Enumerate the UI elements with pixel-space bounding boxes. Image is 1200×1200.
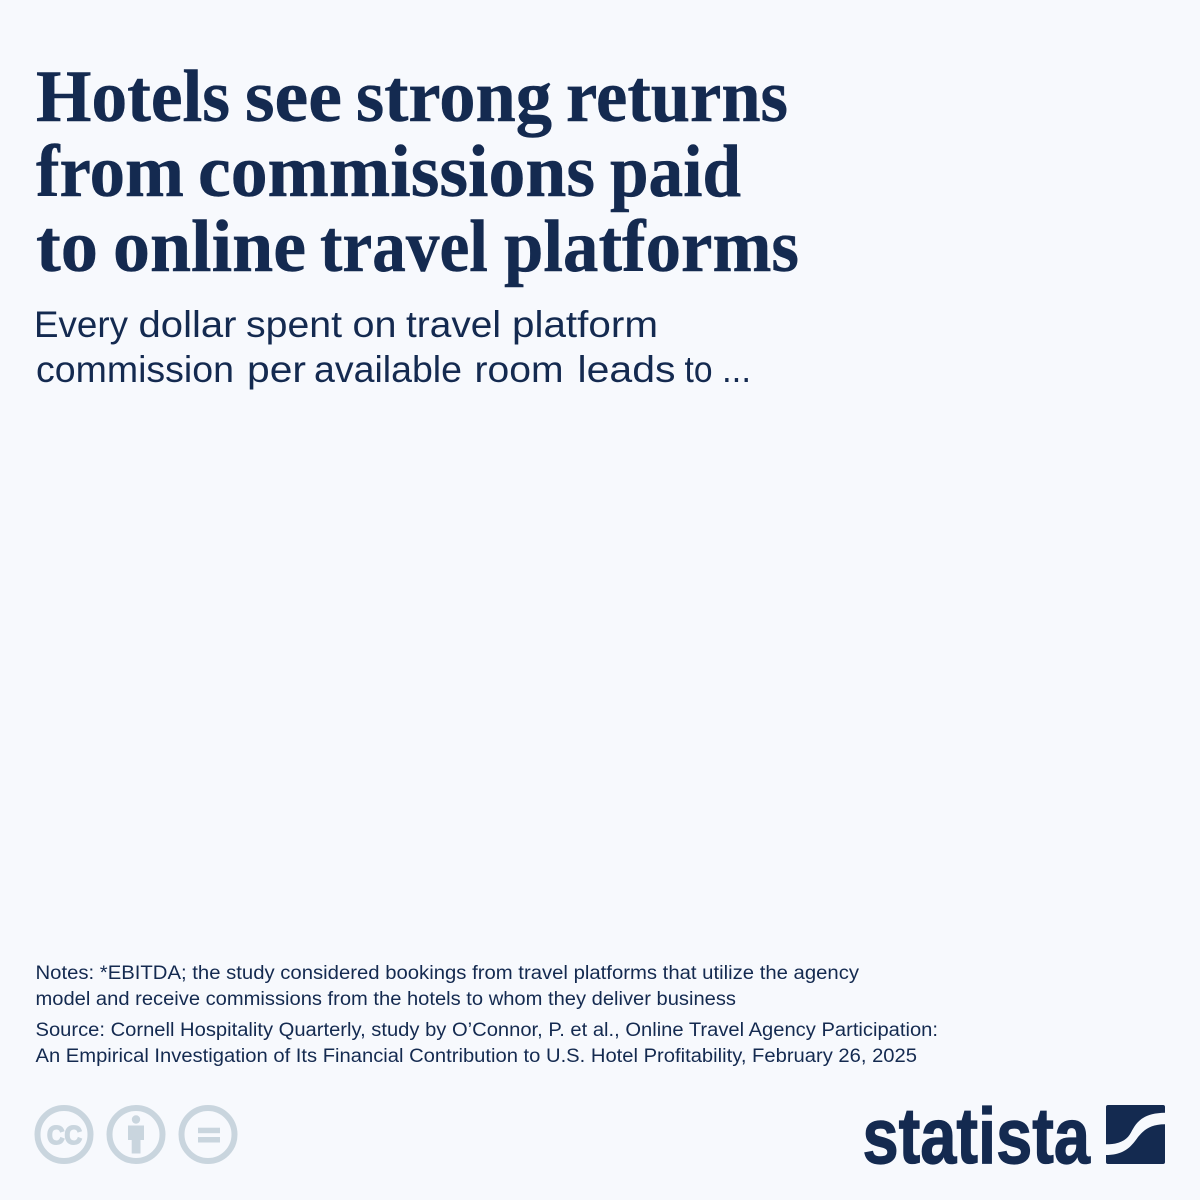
title: to <box>36 206 98 288</box>
subtitle: Every <box>34 304 128 345</box>
subtitle: spent <box>246 304 343 345</box>
title: travel <box>320 206 488 288</box>
title <box>36 56 799 288</box>
icon: attribution <box>110 1108 162 1161</box>
title: strong <box>356 56 552 138</box>
notes: model and receive commissions from the hotels to whom they deliver business <box>36 989 736 1010</box>
subtitle: travel <box>406 304 501 345</box>
title: returns <box>566 56 788 138</box>
source <box>36 1020 938 1067</box>
subtitle: available <box>314 349 462 390</box>
subtitle: commission <box>36 349 234 390</box>
subtitle: to <box>684 349 712 390</box>
title: from <box>36 131 184 213</box>
notes: Notes: *EBITDA; the study considered bookings from travel platforms that utilize the agency <box>36 963 860 984</box>
icon: creative commons <box>38 1108 90 1161</box>
subtitle: ... <box>722 349 751 390</box>
title: see <box>245 56 342 138</box>
notes <box>36 963 860 1010</box>
subtitle: on <box>352 304 396 345</box>
icon: statista mark <box>1106 1105 1165 1164</box>
subtitle <box>34 304 751 390</box>
source: Source: Cornell Hospitality Quarterly, study by O’Connor, P. et al., Online Travel Agency Participation: <box>36 1020 938 1041</box>
subtitle: leads <box>578 349 676 390</box>
subtitle: per <box>247 349 306 390</box>
statista logo <box>862 1091 1165 1180</box>
title: online <box>113 206 306 288</box>
subtitle: room <box>474 349 564 390</box>
title: commissions <box>198 131 595 213</box>
icon: creative commons: CC <box>47 1120 82 1150</box>
icon: no derivatives <box>182 1108 234 1161</box>
source: An Empirical Investigation of Its Financial Contribution to U.S. Hotel Profitability, February 26, 2025 <box>36 1046 917 1067</box>
title: Hotels <box>36 56 230 138</box>
title: platforms <box>504 206 799 288</box>
title: paid <box>610 131 741 213</box>
subtitle: dollar <box>138 304 236 345</box>
subtitle: platform <box>512 304 658 345</box>
statista wordmark: statista <box>862 1091 1091 1180</box>
